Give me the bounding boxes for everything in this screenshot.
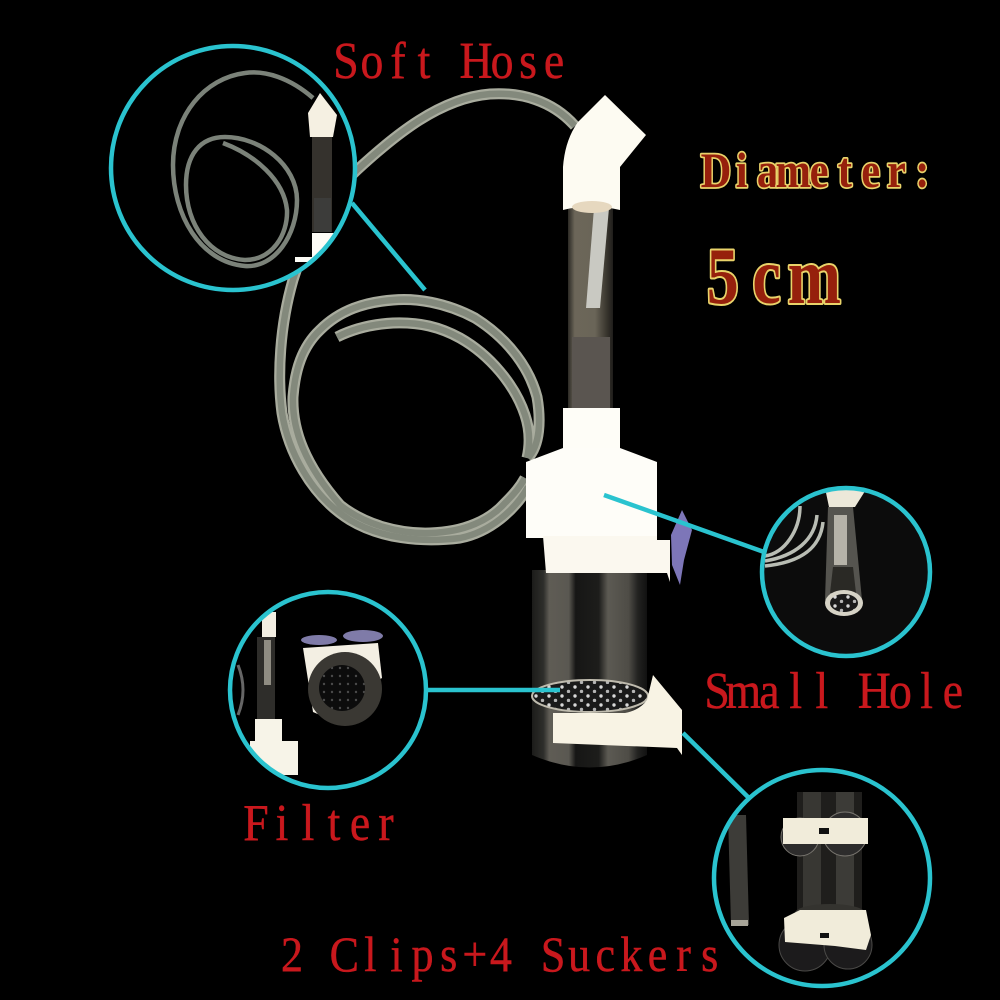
inset tube	[312, 135, 332, 232]
inset tube	[825, 507, 862, 600]
inset: small hole	[762, 488, 930, 656]
upper suckers	[781, 818, 819, 856]
inset cap	[826, 490, 864, 507]
foam section	[572, 337, 610, 409]
label: 2 Clips + 4 Suckers: 2 Clips+4 Suckers	[281, 927, 718, 983]
bottom clip	[553, 675, 682, 755]
main device: skimmer assembly	[526, 95, 692, 768]
elbow connector	[563, 95, 646, 210]
label: Filter: Filter	[243, 793, 394, 852]
inset block	[250, 719, 298, 775]
neck block	[563, 408, 620, 452]
inset hose coil	[173, 72, 313, 266]
side tube	[728, 815, 749, 925]
lower filter	[795, 904, 863, 912]
inset hoses	[765, 506, 823, 566]
suction cups	[301, 635, 337, 645]
suction cup	[671, 510, 692, 585]
label: Diameter: Diameter:	[701, 144, 929, 199]
elbow opening	[572, 201, 612, 213]
inset hole disc	[825, 590, 863, 616]
filter clip plate	[303, 643, 382, 715]
upper clip	[783, 818, 868, 844]
inset cylinder	[797, 792, 862, 910]
inner soft tube	[586, 208, 609, 308]
inset: filter	[230, 592, 426, 788]
inset: soft hose	[111, 46, 355, 290]
lower clip	[784, 910, 871, 950]
lower suckers	[778, 928, 828, 972]
pointer lines	[352, 203, 764, 800]
filter disc	[308, 652, 382, 726]
upper tube	[568, 205, 613, 410]
large block	[526, 448, 657, 538]
label: 5cm: 5cm	[707, 231, 841, 321]
label: Small Hole: Small Hole	[704, 661, 963, 720]
inset tube	[257, 637, 275, 719]
hose edge	[238, 665, 243, 715]
inset: clips and suckers	[714, 770, 930, 986]
soft hose	[280, 94, 575, 540]
top clip	[543, 536, 670, 582]
inset elbow	[308, 93, 337, 137]
filter plate	[532, 680, 648, 712]
label: Soft Hose: Soft Hose	[333, 31, 564, 90]
inset block	[295, 233, 335, 262]
cylinder body	[532, 570, 647, 768]
